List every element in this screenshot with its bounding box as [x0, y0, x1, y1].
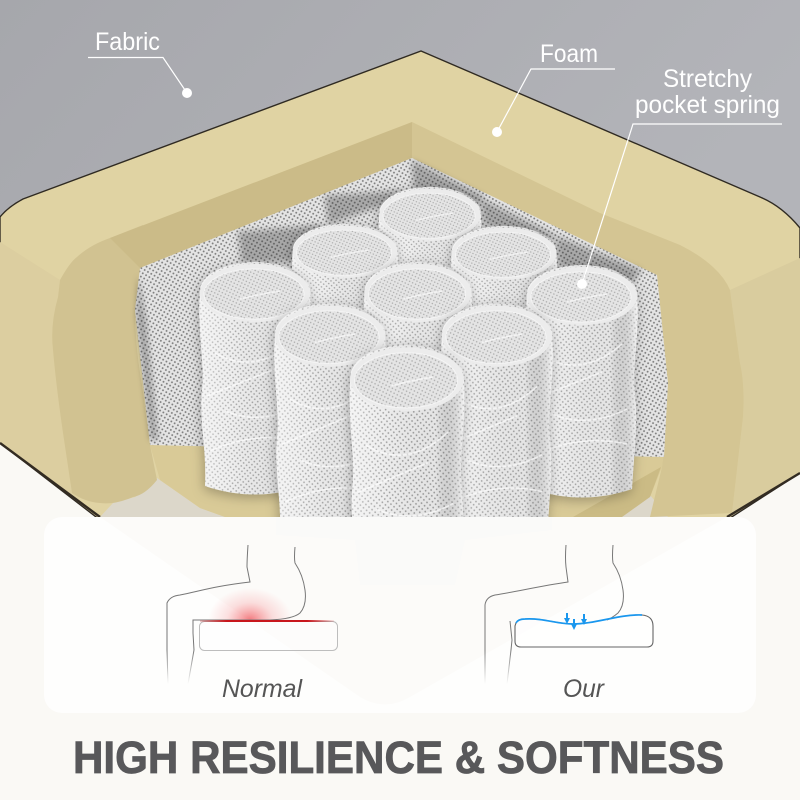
cushion: [200, 622, 338, 650]
foam inner left face: [52, 225, 157, 503]
spring: back centre: [372, 185, 486, 268]
title: HIGH RESILIENCE & SOFTNESS: [73, 732, 724, 783]
foam floor wedge: [573, 467, 661, 517]
diagram: our cushion: [485, 545, 653, 684]
body outline: [485, 545, 568, 650]
spring: middle right: [526, 265, 638, 498]
spring: back right: [444, 224, 562, 308]
spring: middle centre: [357, 258, 477, 352]
foam top surface: [0, 51, 800, 520]
dark bottom edges: [0, 443, 800, 517]
pressure glow: [213, 592, 286, 620]
diagram: normal cushion: [167, 545, 338, 684]
callout: stretchy pocket spring: Stretchy: [663, 65, 752, 93]
ghost of mattress under panel: [100, 517, 727, 704]
callout: stretchy pocket spring: [577, 65, 782, 289]
foam back left wall: [110, 122, 412, 268]
spring: middle left: [199, 262, 311, 494]
foam right outer face: [799, 258, 800, 473]
callout: fabric: Fabric: [95, 28, 160, 56]
callout: foam: [492, 40, 615, 137]
callout: fabric: [88, 28, 192, 98]
callout: stretchy pocket spring: pocket spring: [635, 91, 780, 119]
label: Normal: Normal: [222, 675, 303, 703]
blue surface line: [516, 615, 642, 624]
icon: pressure arrows: [564, 613, 587, 630]
fading legs: [167, 650, 194, 684]
ghost of front spring: [276, 517, 552, 585]
panel: mattress cross-section: [0, 50, 800, 517]
spring: front centre: [342, 342, 470, 517]
callout: foam: Foam: [540, 40, 598, 68]
spring: front right: [441, 304, 553, 548]
spring: front left: [274, 304, 386, 548]
back pockets: [136, 160, 642, 440]
foam left outer face: [0, 242, 1, 443]
label: Our: Our: [563, 675, 606, 703]
panel: fabric layer: [0, 0, 800, 260]
spring: back left: [286, 221, 403, 310]
fading legs: [485, 650, 511, 684]
spring back wall: [135, 158, 668, 457]
panel: comparison: [44, 517, 756, 713]
foam floor: [150, 445, 664, 517]
foam back right wall: [412, 122, 744, 517]
bottom base fabric: [100, 478, 668, 517]
red pressure line: [200, 620, 334, 622]
body outline: [167, 545, 250, 650]
cushion: [515, 615, 653, 647]
